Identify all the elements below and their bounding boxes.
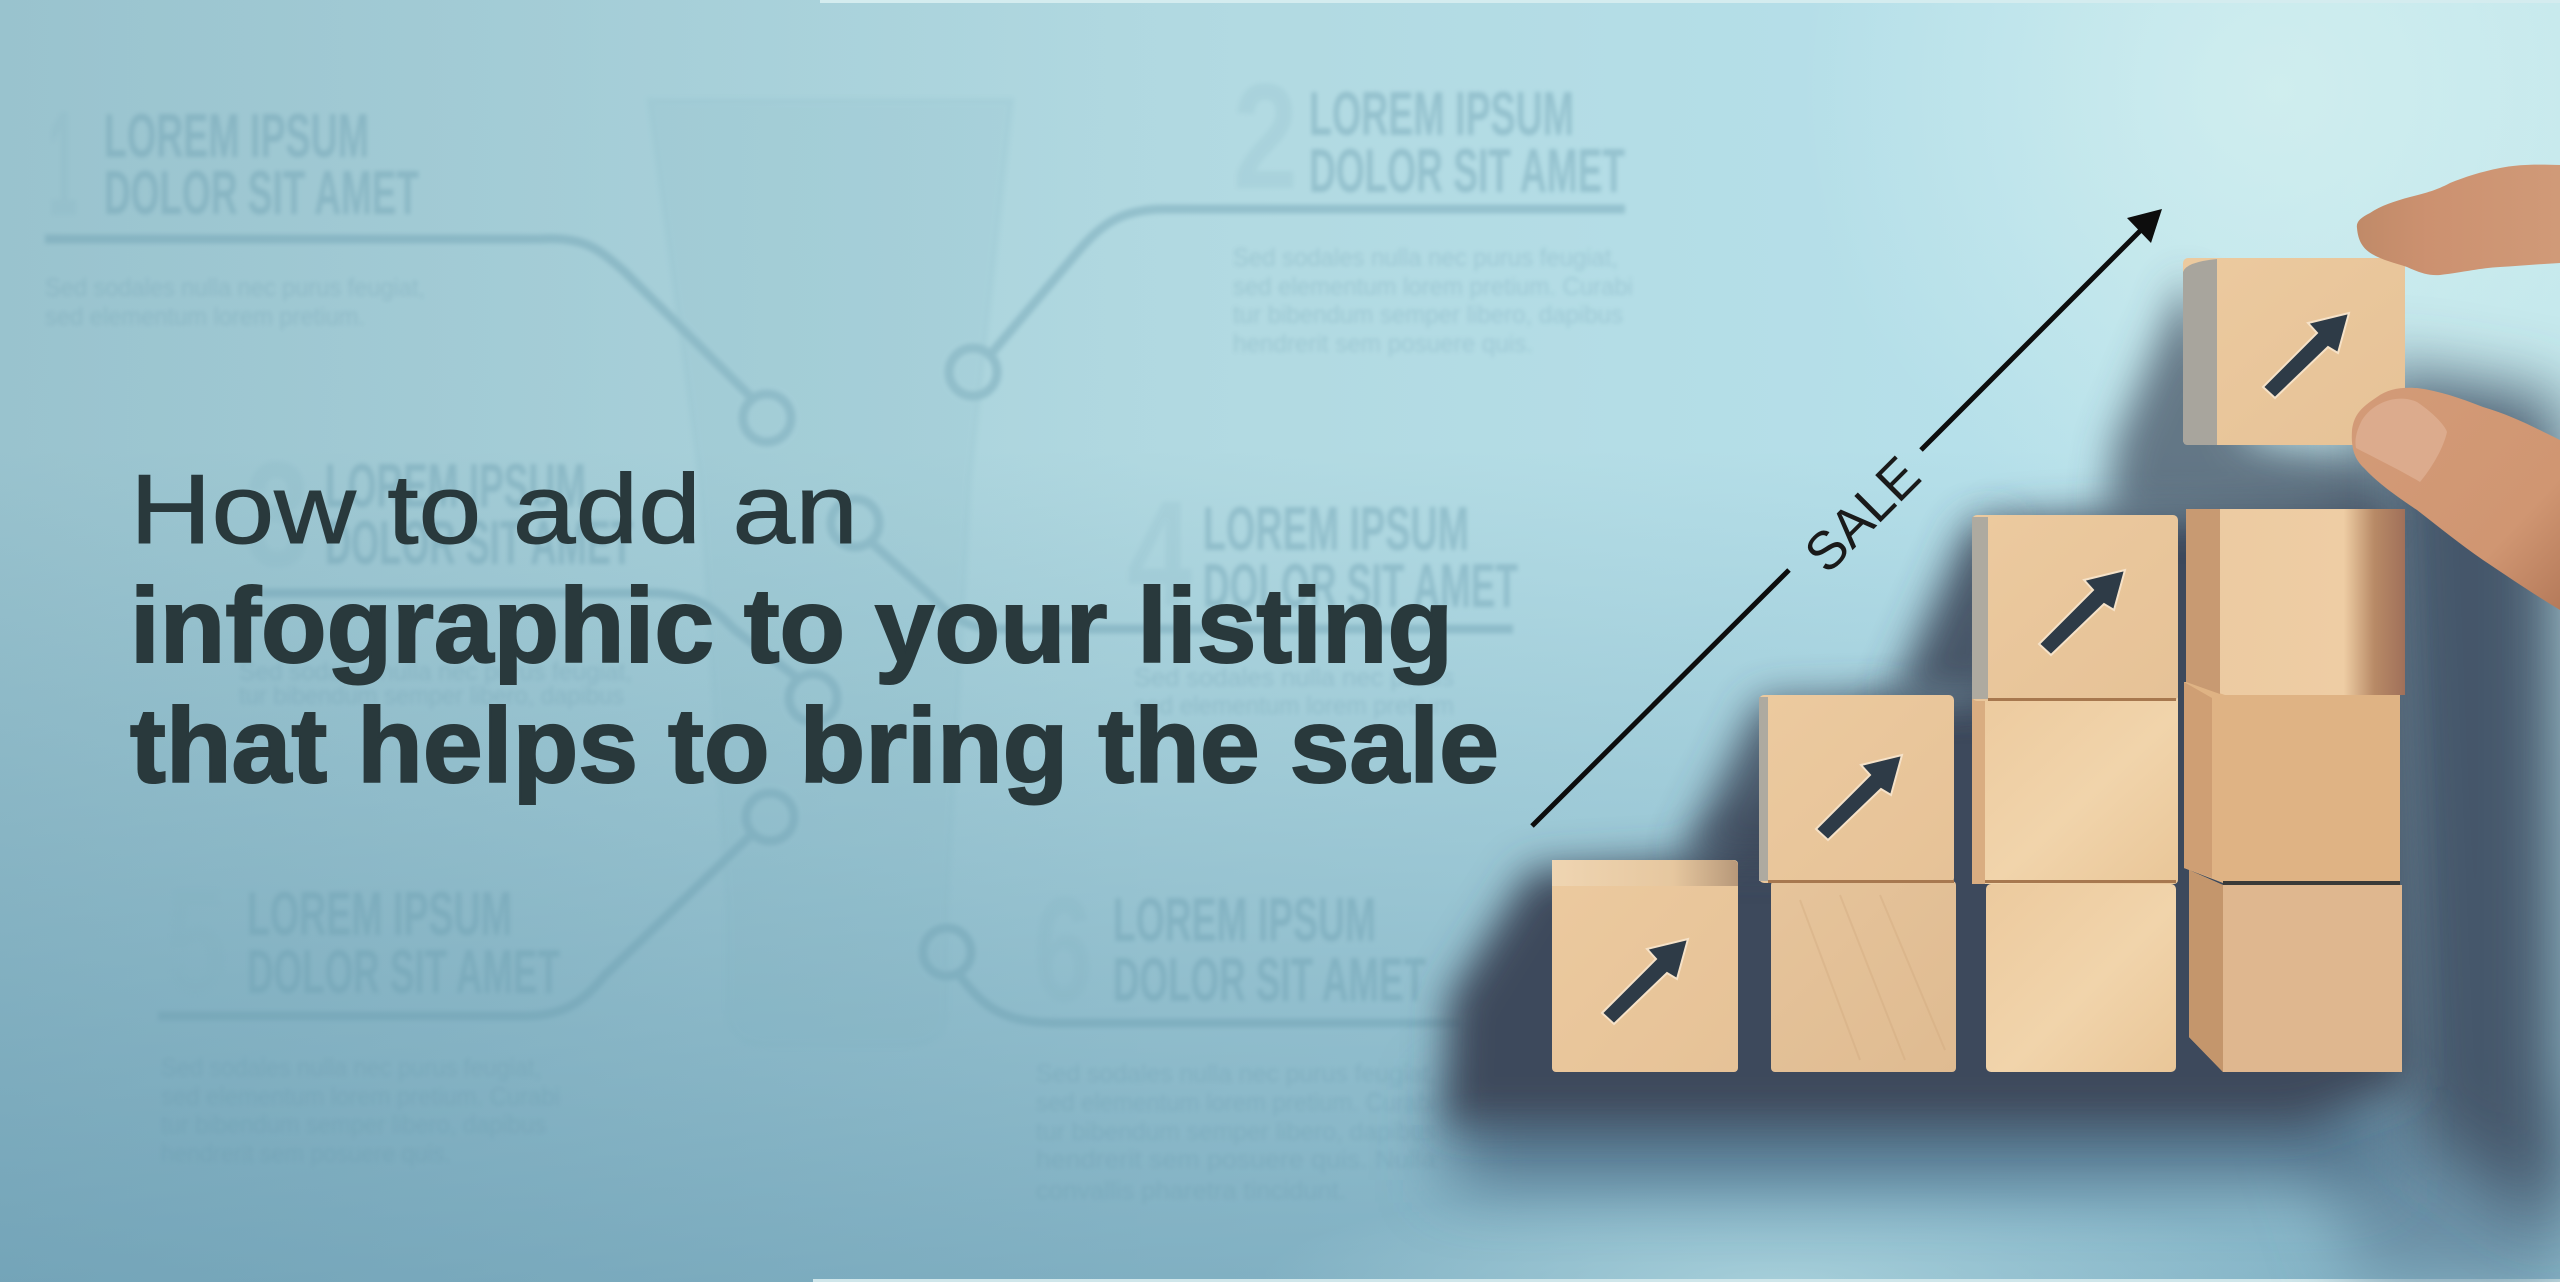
icon: arrow — [1816, 755, 1902, 840]
ghost body text: sed elementum lorem pretium. Curabi — [1233, 273, 1633, 301]
icon: arrow — [2039, 570, 2125, 655]
ghost numbers: 6 — [1033, 865, 1093, 1033]
ghost body text: Sed sodales nulla nec purus feugiat, — [1036, 1060, 1436, 1088]
block: column 3 bottom — [1986, 884, 2176, 1072]
ghost body text: sed elementum lorem pretium — [1134, 692, 1454, 720]
block: column 4 bottom — [2189, 870, 2402, 1072]
ghost headings: LOREM IPSUM — [1309, 80, 1574, 149]
ghost body text: Sed sodales nulla nec purus feugiat, — [161, 1054, 541, 1082]
ghost body text: sed elementum lorem pretium. Curabi — [1036, 1089, 1436, 1117]
fingernail — [2355, 399, 2447, 482]
ghost numbers: 4 — [1127, 469, 1192, 637]
ghost headings: DOLOR SIT AMET — [247, 938, 560, 1007]
title line 2: infographic to your listing — [130, 567, 1453, 685]
ghost headings: DOLOR SIT AMET — [1113, 946, 1426, 1015]
ghost numbers: 1 — [48, 79, 78, 247]
ghost body text: Sed sodales nulla nec purus feugiat, — [45, 274, 425, 302]
ghost product tube — [649, 100, 1012, 1046]
block: column 4 top — [2186, 509, 2405, 695]
ghost connector lines — [45, 209, 1625, 1023]
ghost body text: tur bibendum semper libero, dapibus — [161, 1111, 546, 1139]
block: held block with arrow — [2183, 258, 2405, 445]
ghost headings: LOREM IPSUM — [1203, 495, 1469, 564]
label: SALE: SALE — [1793, 445, 1932, 584]
ghost headings: DOLOR SIT AMET — [104, 159, 419, 228]
faded infographic in background — [45, 52, 1633, 1205]
block: column 3 top with arrow — [1972, 515, 2178, 701]
ghost body text — [45, 244, 1633, 1205]
ghost headings — [104, 80, 1625, 1015]
block: column 3 middle — [1972, 694, 2178, 884]
ghost headings: LOREM IPSUM — [325, 452, 586, 521]
title — [130, 454, 1499, 805]
arrow line: lower segment — [1532, 570, 1789, 826]
ghost body text: tur bibendum semper libero, dapibus — [239, 682, 624, 710]
ghost headings: DOLOR SIT AMET — [1203, 552, 1518, 621]
ghost body text: sed elementum lorem pretium. Curabi — [161, 1083, 560, 1111]
ghost body text: hendrerit sem posuere quis. — [161, 1140, 451, 1168]
ghost body text: Sed sodales nulla nec purus feugiat, — [1233, 244, 1618, 272]
ghost body text: sed elementum lorem pretium. — [45, 303, 365, 331]
ghost numbers: 3 — [245, 430, 310, 598]
ghost body text: Sed sodales nulla nec purus — [1134, 664, 1454, 692]
title line 1: How to add an — [130, 454, 858, 564]
block: column 4 middle — [2184, 682, 2400, 885]
icon: arrow — [1602, 939, 1688, 1024]
ghost body text: hendrerit sem posuere quis. Nulla — [1036, 1146, 1436, 1174]
title line 3: that helps to bring the sale — [130, 687, 1499, 805]
arrow line: upper segment — [1921, 229, 2142, 450]
icon: arrow — [2263, 313, 2349, 398]
ghost headings: LOREM IPSUM — [1113, 886, 1376, 955]
ghost headings: LOREM IPSUM — [247, 880, 512, 949]
wooden blocks — [1552, 258, 2405, 1072]
arrow head — [2127, 209, 2162, 243]
ghost body text: convallis pharetra tincidunt. — [1036, 1177, 1346, 1205]
block: column 1 with arrow — [1552, 860, 1738, 1072]
ghost headings: DOLOR SIT AMET — [1309, 137, 1625, 206]
finger: lower — [2352, 388, 2560, 610]
sale trend arrow — [1532, 209, 2162, 826]
ghost numbers — [48, 52, 1298, 1033]
ghost body text: Sed sodales nulla nec purus feugiat, — [239, 658, 632, 686]
hand fingers — [2352, 165, 2560, 610]
finger: upper — [2357, 165, 2560, 275]
block shadows — [1445, 275, 2560, 1282]
ghost numbers: 5 — [165, 857, 227, 1025]
ghost body text: tur bibendum semper libero, dapibus — [1036, 1118, 1436, 1146]
ghost headings: LOREM IPSUM — [104, 102, 369, 171]
ghost numbers: 2 — [1233, 52, 1298, 220]
block: column 2 top with arrow — [1759, 695, 1954, 883]
ghost headings: DOLOR SIT AMET — [325, 509, 633, 578]
block: column 2 bottom — [1771, 881, 1956, 1072]
ghost body text: hendrerit sem posuere quis. — [1233, 330, 1533, 358]
ghost body text: tur bibendum semper libero, dapibus — [1233, 301, 1623, 329]
